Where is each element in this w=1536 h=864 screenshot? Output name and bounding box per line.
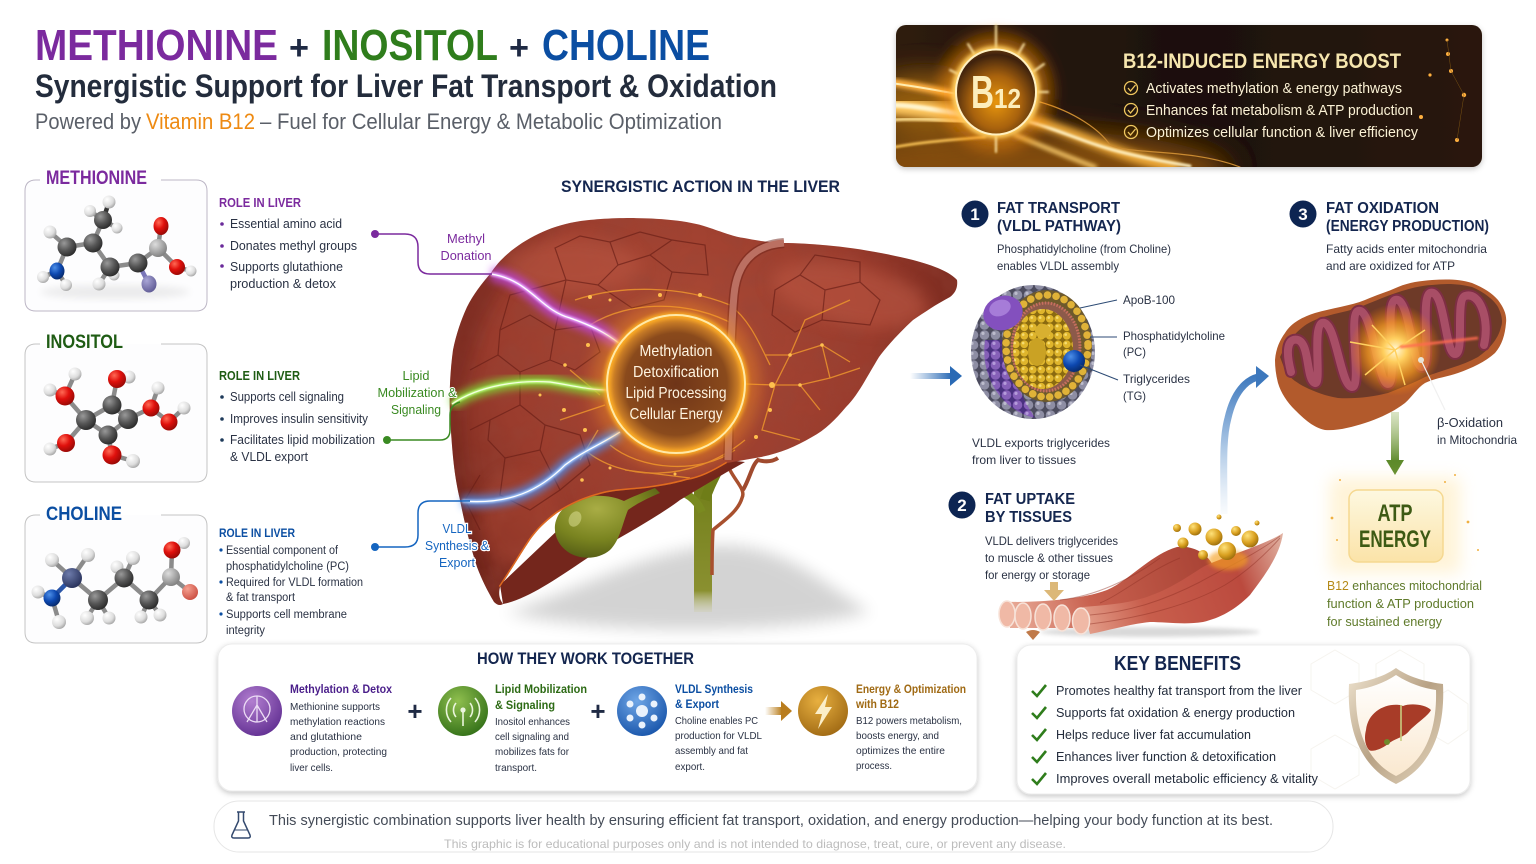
- banner checklist: Optimizes cellular function & liver efficiency: [1146, 124, 1418, 141]
- step 2: fat uptake heading: FAT UPTAKE: [985, 491, 1075, 508]
- text block: inositol role: ROLE IN LIVER: [219, 369, 300, 383]
- text block: B12 enhances: for sustained energy: [1327, 615, 1443, 629]
- arrow: liver to VLDL: [910, 366, 962, 386]
- purple energy stream: [491, 274, 620, 344]
- text block: energy: [855, 684, 966, 772]
- bile duct: [664, 458, 778, 612]
- connector: lipid mobilization: [378, 368, 460, 444]
- text block: step 1 description: enables VLDL assembly: [997, 259, 1119, 273]
- arrow: mitochondria to ATP: [1386, 412, 1404, 475]
- ATP energy box: ATP: [1378, 500, 1412, 527]
- gallbladder: [555, 488, 660, 558]
- text block: choline role: Required for VLDL formation: [226, 577, 363, 589]
- text block: methionine role: Essential amino acid: [230, 217, 342, 231]
- label: methyl donation: Methyl: [447, 231, 485, 246]
- banner checklist: Enhances fat metabolism & ATP production: [1146, 102, 1413, 119]
- step 1: fat transport heading: 1: [970, 205, 980, 224]
- liver shadow: [505, 545, 870, 629]
- ATP energy box: ENERGY: [1359, 526, 1431, 553]
- icon: choline molecule: [32, 537, 198, 629]
- text block: choline role: integrity: [226, 625, 265, 637]
- checklist: benefits: [1032, 683, 1318, 786]
- text block: VLDL synthesis: & Export: [675, 699, 719, 711]
- text block: energy: with B12: [855, 699, 899, 711]
- falciform ligament: [728, 243, 784, 460]
- blue energy stream: [462, 432, 620, 502]
- checklist: benefits: Improves overall metabolic efficiency & vitality: [1056, 771, 1318, 786]
- liver body: [450, 218, 957, 605]
- text block: VLDL synthesis: [675, 684, 762, 773]
- tagline: Powered by: [35, 109, 141, 134]
- step 3: fat oxidation heading: FAT OXIDATION: [1326, 200, 1439, 217]
- connector: VLDL synthesis: [371, 501, 489, 570]
- text block: inositol role: Facilitates lipid mobilization: [230, 433, 375, 447]
- step 3: fat oxidation heading: (ENERGY PRODUCTION): [1326, 218, 1489, 235]
- liver texture: [454, 218, 958, 593]
- label: methyl donation: Donation: [440, 248, 492, 263]
- heading: how they work together: HOW THEY WORK TOGETHER: [477, 650, 694, 668]
- arrow: small out of muscle: [1026, 630, 1040, 640]
- text block: inositol role: Improves insulin sensitivity: [230, 412, 369, 426]
- VLDL labels: ApoB-100: [1123, 293, 1175, 307]
- icon: methionine molecule: [37, 196, 196, 299]
- panel: B12 energy boost banner: [893, 22, 1485, 172]
- ATP energy box: [1330, 474, 1479, 573]
- panel: key benefits: [1017, 645, 1470, 794]
- text block: methionine role: Donates methyl groups: [230, 239, 357, 253]
- text block: VLDL synthesis: VLDL Synthesis: [675, 684, 753, 696]
- arrow: to energy: [765, 701, 792, 721]
- panel: choline card: [25, 503, 207, 643]
- text block: VLDL exports: VLDL exports triglycerides: [972, 436, 1110, 450]
- liver orange network: [500, 289, 860, 587]
- VLDL labels: Triglycerides: [1123, 372, 1190, 386]
- beta-oxidation label: in Mitochondria: [1437, 433, 1517, 447]
- core labels: [626, 343, 726, 423]
- title: INOSITOL: [322, 21, 498, 70]
- text block: energy: optimizes the entire: [856, 745, 945, 757]
- banner checklist: Activates methylation & energy pathways: [1146, 80, 1402, 97]
- panel: inositol card: [25, 331, 207, 482]
- subtitle: Synergistic Support for Liver Fat Transport & Oxidation: [35, 68, 777, 104]
- tagline: Vitamin B12: [146, 109, 255, 134]
- text block: VLDL exports: from liver to tissues: [972, 453, 1076, 467]
- text block: step 2 description: VLDL delivers triglycerides: [985, 534, 1118, 548]
- icon: energy bolt: [798, 686, 848, 736]
- heading: synergistic action: SYNERGISTIC ACTION IN THE LIVER: [561, 178, 840, 196]
- label: lipid mobilization: Signaling: [391, 402, 441, 417]
- text block: VLDL exports: [972, 436, 1110, 467]
- text block: energy: process.: [856, 760, 892, 772]
- label: VLDL synthesis: [425, 521, 489, 570]
- text block: methionine role: [219, 196, 357, 291]
- beta-oxidation label: β-Oxidation: [1437, 416, 1503, 430]
- text block: choline role: [219, 526, 363, 637]
- muscle illustration: [999, 514, 1283, 640]
- panel: how they work together: [218, 644, 977, 791]
- checklist: benefits: Helps reduce liver fat accumulation: [1056, 727, 1251, 742]
- text block: energy: Energy & Optimization: [856, 684, 966, 696]
- step 2: fat uptake heading: 2: [957, 496, 967, 515]
- label: lipid mobilization: Mobilization &: [378, 385, 457, 400]
- step 1: fat transport heading: [962, 200, 1121, 235]
- fat droplets: [1173, 514, 1260, 560]
- summary sentence: This synergistic combination supports liver health by ensuring efficient fat transport, oxidation, and energy production—helping your body function at its best.: [269, 813, 1273, 829]
- step 3: fat oxidation heading: 3: [1298, 205, 1308, 224]
- heading: inositol: INOSITOL: [46, 331, 123, 353]
- text block: inositol role: Supports cell signaling: [230, 390, 344, 404]
- text block: methylation: [290, 684, 393, 774]
- text block: choline role: Essential component of: [226, 545, 339, 557]
- core labels: Lipid Processing: [626, 385, 726, 402]
- step 3: fat oxidation heading: [1290, 200, 1489, 235]
- disclaimer: This graphic is for educational purposes only and is not intended to diagnose, treat, cure, or prevent any disease.: [444, 837, 1066, 851]
- VLDL labels: Phosphatidylcholine: [1123, 329, 1225, 343]
- core labels: Cellular Energy: [630, 406, 722, 423]
- text block: choline role: Supports cell membrane: [226, 609, 347, 621]
- heading: methionine: METHIONINE: [46, 167, 147, 189]
- text block: lipid mobilization: [495, 684, 587, 774]
- text block: methylation: and glutathione: [290, 731, 362, 743]
- core labels: Methylation: [640, 343, 712, 360]
- label: lipid mobilization: [378, 368, 457, 417]
- text block: methylation: methylation reactions: [290, 716, 385, 728]
- text block: step 3 description: [1326, 242, 1487, 273]
- icon: signaling: [438, 686, 488, 736]
- checklist: benefits: Supports fat oxidation & energy production: [1056, 705, 1295, 720]
- text block: lipid mobilization: cell signaling and: [495, 731, 569, 743]
- text block: VLDL synthesis: production for VLDL: [675, 730, 762, 742]
- muscle fibre ends: [999, 601, 1090, 634]
- fat splash: [1208, 550, 1248, 570]
- step 1: fat transport heading: (VLDL PATHWAY): [997, 218, 1121, 235]
- banner heading: B12-INDUCED ENERGY BOOST: [1123, 50, 1401, 73]
- connector: methyl donation: [371, 230, 492, 274]
- icon: methylation: [232, 686, 282, 736]
- liver illustration: [440, 210, 965, 629]
- text block: inositol role: & VLDL export: [230, 450, 308, 464]
- text block: lipid mobilization: Inositol enhances: [495, 716, 570, 728]
- text block: step 1 description: [997, 242, 1171, 273]
- text block: methylation: Methylation & Detox: [290, 684, 393, 696]
- title: +: [509, 29, 529, 67]
- step 2: fat uptake heading: [948, 491, 1075, 526]
- text block: VLDL synthesis: Choline enables PC: [675, 715, 758, 727]
- text block: B12 enhances: [1327, 579, 1482, 629]
- tagline: [35, 109, 722, 134]
- icon: B12 orb: [930, 24, 1062, 160]
- tagline: – Fuel for Cellular Energy & Metabolic Optimization: [260, 109, 722, 134]
- text block: energy: boosts energy, and: [856, 730, 939, 742]
- beta-oxidation label: [1418, 357, 1517, 447]
- oxidation burst: [1349, 304, 1441, 396]
- heading: choline: CHOLINE: [46, 503, 122, 525]
- label: VLDL synthesis: VLDL: [442, 521, 472, 536]
- checklist: benefits: Promotes healthy fat transport from the liver: [1056, 683, 1303, 698]
- text block: lipid mobilization: Lipid Mobilization: [495, 684, 587, 696]
- VLDL labels: (PC): [1123, 345, 1146, 359]
- icon: inositol molecule: [44, 368, 190, 468]
- core labels: Detoxification: [633, 364, 719, 381]
- panel: methionine card: [25, 167, 207, 311]
- text block: methylation: Methionine supports: [290, 701, 380, 713]
- step 2: fat uptake heading: BY TISSUES: [985, 509, 1072, 526]
- text block: B12 enhances: B12 enhances mitochondrial: [1327, 579, 1482, 593]
- arrow: small into muscle: [1044, 582, 1064, 601]
- icon: B12 orb: 12: [994, 83, 1021, 114]
- text block: step 2 description: to muscle & other tissues: [985, 551, 1113, 565]
- label: lipid mobilization: Lipid: [402, 368, 430, 383]
- text block: step 2 description: for energy or storage: [985, 568, 1090, 582]
- glowing core: [592, 300, 760, 468]
- step 1: fat transport heading: FAT TRANSPORT: [997, 200, 1121, 217]
- text block: lipid mobilization: mobilizes fats for: [495, 746, 569, 758]
- label: methyl donation: [440, 231, 492, 263]
- text block: choline role: ROLE IN LIVER: [219, 526, 295, 540]
- text block: methylation: liver cells.: [290, 762, 333, 774]
- text block: methionine role: production & detox: [230, 277, 337, 291]
- icon: B12 orb: B: [971, 66, 994, 118]
- text block: step 2 description: [985, 534, 1118, 582]
- checklist: benefits: Enhances liver function & detoxification: [1056, 749, 1276, 764]
- text block: step 3 description: Fatty acids enter mitochondria: [1326, 242, 1487, 256]
- liver surface shading: [450, 232, 544, 589]
- energy streams: [890, 82, 1240, 167]
- text block: B12 enhances: function & ATP production: [1327, 597, 1474, 611]
- VLDL labels: (TG): [1123, 389, 1146, 403]
- text block: methionine role: Supports glutathione: [230, 260, 343, 274]
- liver underside: [500, 460, 745, 604]
- text block: methionine role: ROLE IN LIVER: [219, 196, 301, 210]
- icon: VLDL cluster: [617, 686, 667, 736]
- icon: flask: [232, 812, 250, 838]
- icon: plus: +: [590, 696, 606, 726]
- text block: lipid mobilization: & Signaling: [495, 700, 555, 712]
- title: CHOLINE: [542, 21, 710, 70]
- footer note: [214, 801, 1333, 852]
- text block: step 1 description: Phosphatidylcholine (from Choline): [997, 242, 1171, 256]
- banner checklist: [1124, 80, 1418, 141]
- text block: inositol role: [219, 369, 375, 464]
- text block: methylation: production, protecting: [290, 746, 387, 758]
- liver cell pattern: [465, 232, 880, 530]
- arrow: muscle to mitochondria: [1224, 366, 1269, 514]
- title: +: [289, 29, 309, 67]
- starfield: [1419, 38, 1466, 142]
- green energy stream: [452, 382, 608, 404]
- VLDL labels: [1080, 293, 1225, 403]
- label: VLDL synthesis: Synthesis &: [425, 538, 489, 553]
- text block: choline role: & fat transport: [226, 592, 296, 604]
- VLDL particle illustration: [971, 285, 1095, 419]
- label: VLDL synthesis: Export: [439, 555, 475, 570]
- text block: energy: B12 powers metabolism,: [856, 715, 962, 727]
- mitochondrial cristae: [1288, 293, 1486, 387]
- title: METHIONINE: [35, 21, 278, 70]
- text block: VLDL synthesis: assembly and fat: [675, 745, 748, 757]
- text block: choline role: phosphatidylcholine (PC): [226, 561, 349, 573]
- heading: key benefits: KEY BENEFITS: [1114, 653, 1241, 675]
- icon: liver shield: [1349, 668, 1443, 784]
- mitochondrion illustration: [1275, 279, 1506, 430]
- text block: step 3 description: and are oxidized for ATP: [1326, 259, 1455, 273]
- text block: lipid mobilization: transport.: [495, 762, 537, 774]
- icon: plus: +: [407, 696, 423, 726]
- text block: VLDL synthesis: export.: [675, 761, 705, 773]
- title: [35, 21, 710, 70]
